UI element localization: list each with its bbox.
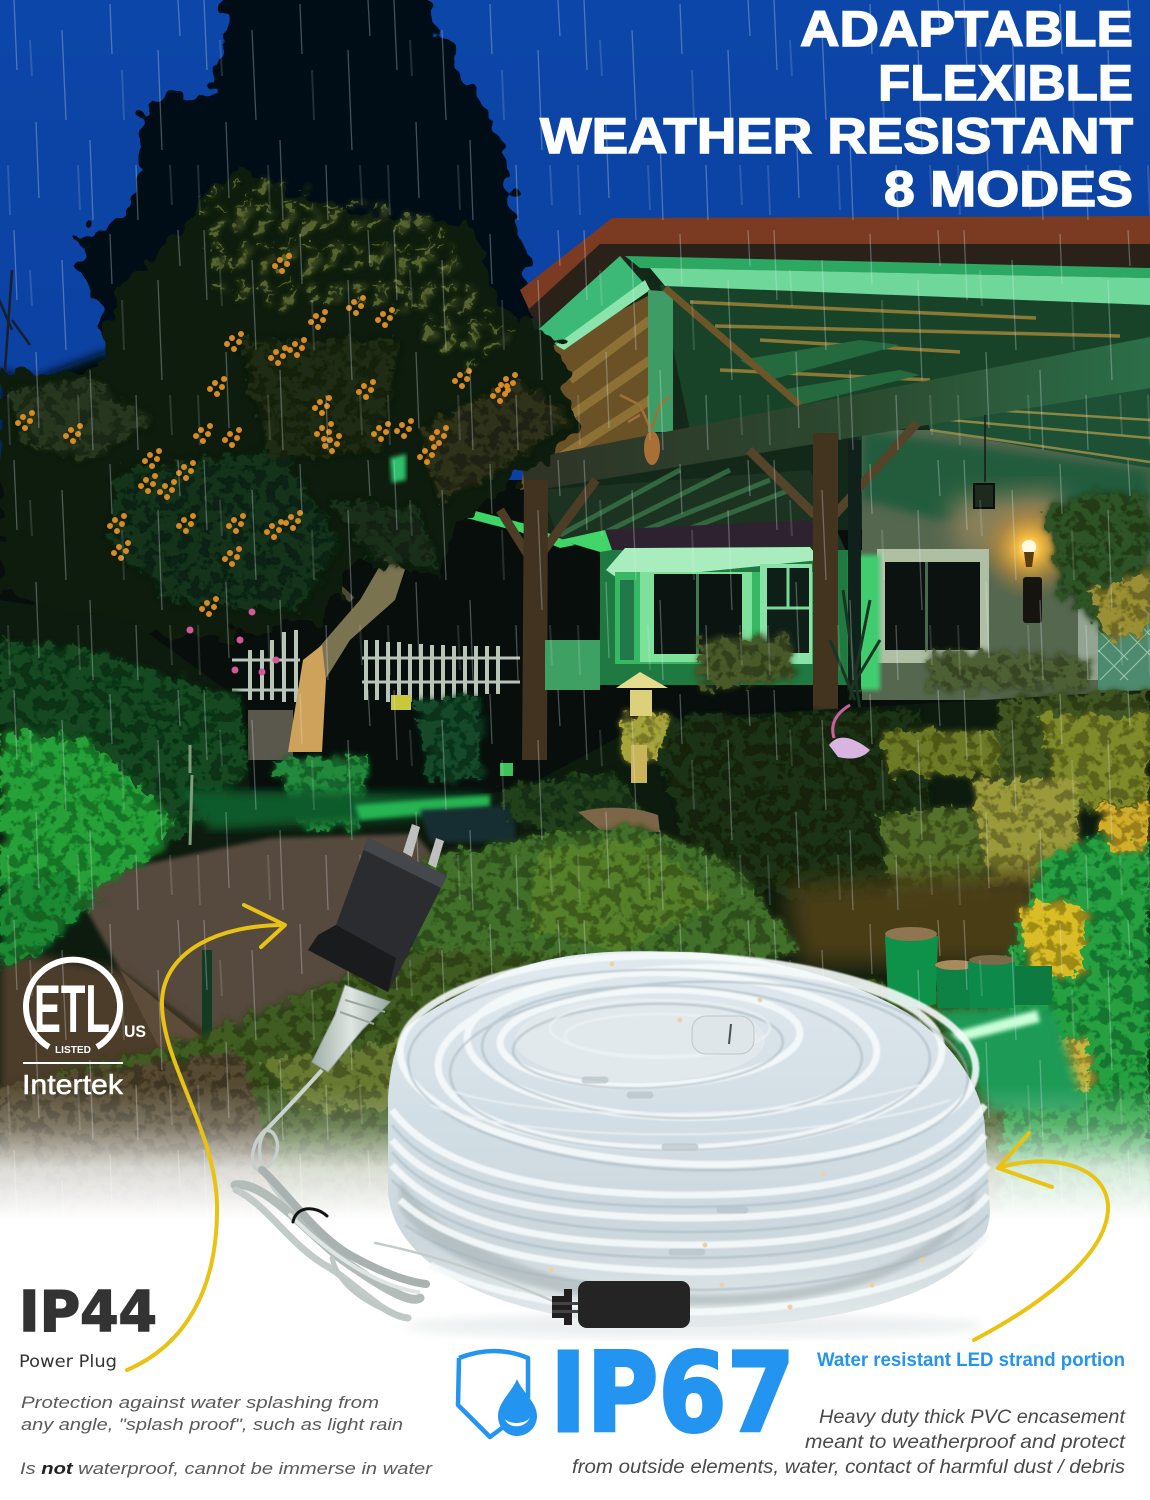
LED rope coil	[388, 946, 990, 1338]
deer trophy	[620, 395, 670, 430]
ETL Intertek certification logo	[22, 960, 146, 1100]
IP44 description: any angle, "splash proof", such as light rain	[21, 1416, 403, 1434]
hanging lantern	[984, 415, 986, 482]
IP44 panel	[19, 1280, 434, 1478]
prongs	[403, 824, 444, 868]
headline: WEATHER RESISTANT	[540, 108, 1133, 164]
posts and braces	[749, 423, 917, 520]
black inline connector	[552, 1281, 690, 1328]
wire bundle	[235, 1128, 555, 1318]
IP44 description	[20, 1394, 434, 1478]
bay window	[606, 547, 820, 580]
IP44 description: Protection against water splashing from	[21, 1394, 379, 1412]
soffit glow	[560, 530, 612, 552]
rock	[578, 808, 660, 832]
stone path	[70, 834, 470, 1040]
IP67 subheading: Water resistant LED strand portion	[817, 1350, 1125, 1371]
subheading: Power Plug	[19, 1352, 117, 1372]
green fence behind	[545, 640, 600, 690]
roof	[520, 216, 1150, 316]
wall right	[862, 430, 1150, 700]
clear connector and wire	[312, 985, 390, 1072]
porch ceiling	[660, 285, 1150, 430]
IP67 description: meant to weatherproof and protect	[805, 1432, 1126, 1453]
green fascia	[625, 256, 1150, 278]
bonsai plants by windows	[700, 490, 1150, 690]
ETL Intertek certification logo: Intertek	[22, 1069, 124, 1100]
ETL Intertek certification logo: US	[124, 1022, 146, 1041]
dark tree silhouette behind	[75, 0, 560, 440]
main beam	[522, 337, 1150, 492]
arrow: LED strand callout	[974, 1133, 1108, 1340]
diamond fence	[1098, 612, 1150, 690]
central low bushes	[0, 825, 1010, 1240]
pagoda lantern	[616, 672, 668, 688]
ETL Intertek certification logo: LISTED	[55, 1045, 91, 1056]
right garden shrubs	[500, 690, 1150, 925]
pink flowers	[47, 612, 276, 680]
headline: ADAPTABLE	[800, 1, 1133, 57]
lower lip shadow	[400, 1180, 975, 1305]
headline: FLEXIBLE	[878, 55, 1133, 111]
wall window	[877, 549, 989, 663]
lantern pedestal	[631, 745, 647, 783]
small connector on coil	[692, 1016, 754, 1054]
IP67 heading: IP67	[550, 1329, 795, 1457]
IP67 description: from outside elements, water, contact of harmful dust / debris	[572, 1457, 1126, 1478]
lower garden dark base	[0, 600, 1150, 1240]
brace	[665, 288, 800, 405]
headline: 8 MODES	[884, 161, 1133, 217]
ceiling right under beam	[925, 380, 1150, 468]
house	[452, 216, 1150, 760]
power plug and wire bundle	[235, 824, 555, 1318]
lower ceiling left of post	[540, 470, 850, 560]
green lit ground and mossy stumps	[885, 927, 1086, 1110]
IP67 description	[572, 1350, 1126, 1478]
white fade at bottom	[0, 1085, 1150, 1220]
icon: shield with water drop	[458, 1351, 537, 1437]
plant right foreground	[1000, 805, 1150, 1240]
loquat tree foliage and fruit	[0, 172, 575, 752]
white picket fence	[232, 630, 520, 702]
plug body	[308, 838, 447, 992]
arrow: plug callout	[127, 905, 285, 1370]
porch backdrop	[530, 250, 1150, 540]
inner core	[515, 998, 765, 1082]
glow beside post	[850, 555, 880, 690]
fruit clusters	[275, 256, 289, 271]
flamingo ornament	[829, 738, 870, 758]
IP44 heading: IP44	[19, 1280, 157, 1345]
headline	[540, 1, 1133, 217]
bay window wall	[600, 550, 862, 685]
ETL Intertek certification logo: ETL	[34, 971, 110, 1047]
dark backdrop behind garden	[0, 480, 1150, 1240]
IP44 description: Is not waterproof, cannot be immerse in water	[20, 1460, 434, 1478]
LEDs	[551, 964, 922, 1307]
left bright green garden	[0, 640, 482, 970]
IP67 description: Heavy duty thick PVC encasement	[819, 1407, 1126, 1428]
